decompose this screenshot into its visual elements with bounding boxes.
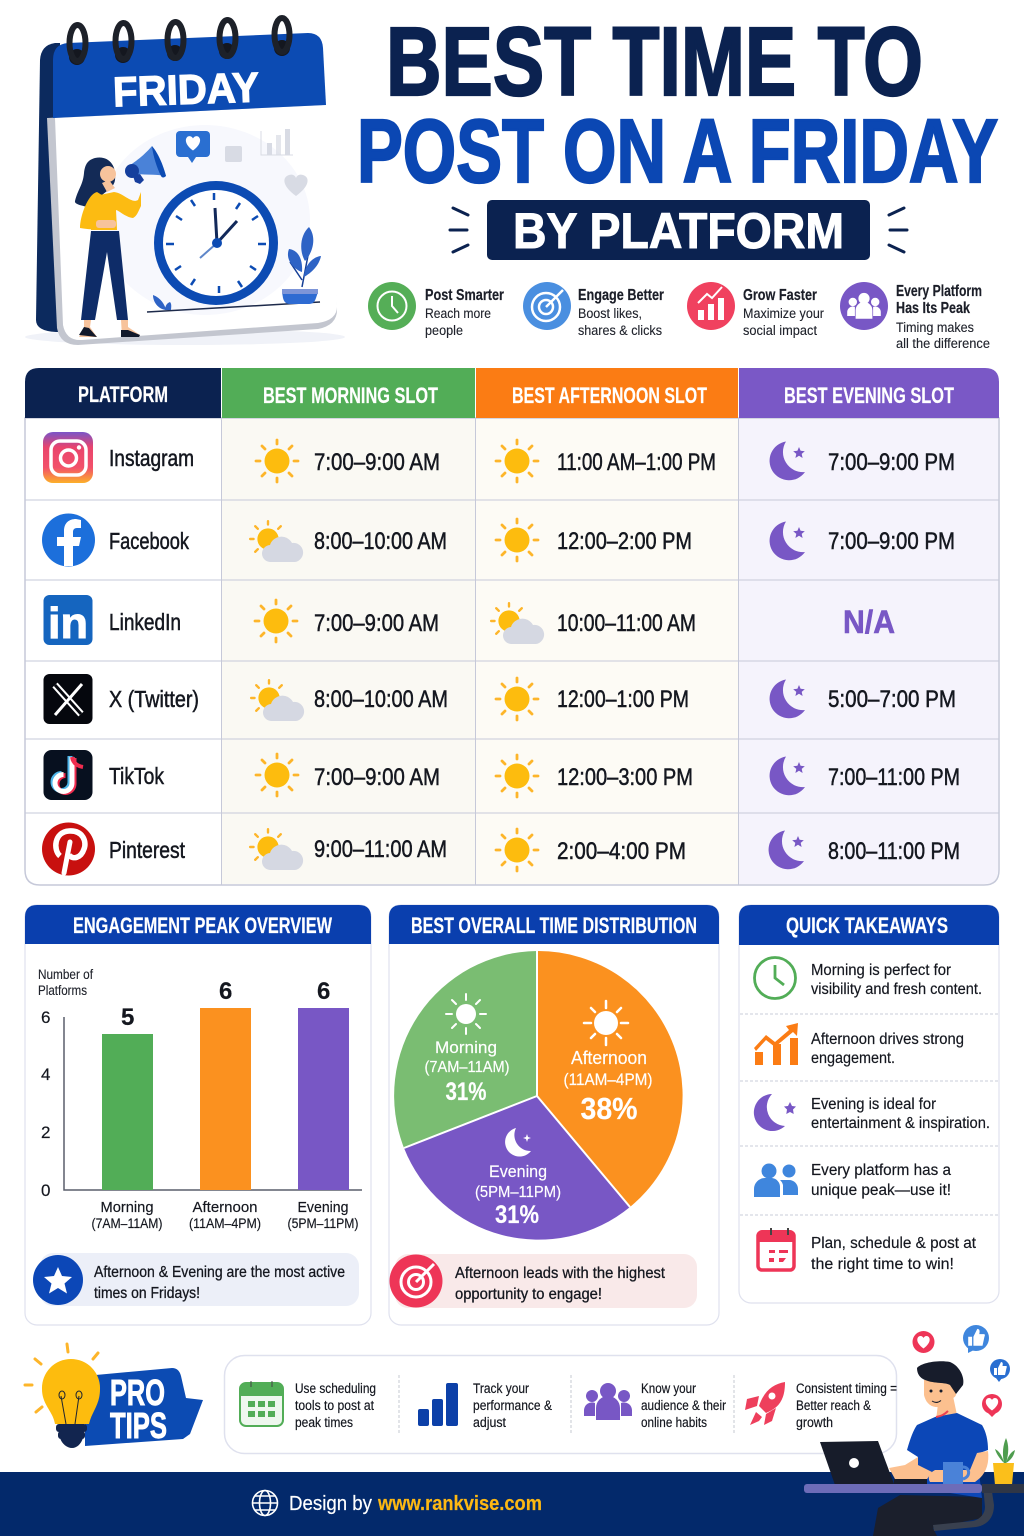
pro tips badge (25, 1344, 203, 1448)
tip: consistency (745, 1381, 897, 1430)
faded icons (225, 129, 308, 196)
takeaway: every platform: unique peak—use it! (811, 1182, 951, 1199)
row: TikTok: TikTok (109, 763, 164, 789)
icon: Instagram (43, 432, 93, 483)
table background (25, 418, 999, 885)
row: Instagram: 7:00–9:00 AM (314, 449, 440, 476)
morning slice icon (446, 994, 486, 1034)
feature: grow faster: social impact (743, 323, 817, 338)
reaction: big thumb (963, 1325, 989, 1353)
icon: X (44, 674, 92, 724)
evening slice label: 31% (495, 1201, 539, 1229)
takeaway: plan (758, 1228, 977, 1273)
feature: grow faster: Maximize your (743, 306, 824, 321)
tip: consistency: Consistent timing = (796, 1381, 897, 1396)
row: LinkedIn (44, 595, 895, 648)
TIPS: TIPS (110, 1405, 167, 1446)
feature: every platform: Every Platform (896, 283, 982, 300)
morning column fill (222, 419, 475, 884)
takeaway: evening: Evening is ideal for (811, 1096, 936, 1113)
bar chart: (7AM–11AM) (92, 1215, 162, 1231)
calendar blue header (53, 33, 326, 118)
tip: scheduling: peak times (295, 1415, 353, 1430)
row: Instagram (43, 432, 955, 483)
row: Facebook (42, 514, 955, 566)
panel heading (25, 905, 371, 944)
row: TikTok (44, 750, 960, 800)
row: LinkedIn: 10:00–11:00 AM (557, 610, 696, 637)
bar chart: (11AM–4PM) (189, 1215, 261, 1231)
row: TikTok: 7:00–9:00 AM (314, 764, 440, 791)
neck (936, 1396, 957, 1420)
footer credit: www.rankvise.com (377, 1493, 542, 1515)
morning slice label: Morning (435, 1038, 497, 1057)
light bulb (25, 1344, 100, 1448)
like bubble (176, 131, 210, 163)
reaction: heart (912, 1331, 934, 1353)
feature: engage better: Boost likes, (578, 306, 642, 321)
woman with megaphone (75, 146, 166, 337)
afternoon slice label: Afternoon (571, 1048, 647, 1068)
row: Pinterest: 8:00–11:00 PM (828, 838, 960, 865)
bar chart: Platforms (38, 983, 87, 998)
tip: audience (584, 1381, 726, 1430)
feature: post smarter: Post Smarter (425, 287, 504, 304)
plant pot (993, 1438, 1015, 1485)
footer credit (252, 1490, 542, 1516)
bar chart: Morning (100, 1199, 154, 1216)
row: Facebook: 7:00–9:00 PM (828, 528, 955, 555)
reaction: small thumb (990, 1359, 1010, 1382)
callout: afternoon leads (390, 1254, 697, 1308)
feature: every platform: all the difference (896, 336, 990, 351)
row: Facebook: 8:00–10:00 AM (314, 528, 447, 555)
row: Instagram: 7:00–9:00 PM (828, 449, 955, 476)
tip: consistency: Better reach & (796, 1398, 871, 1413)
callout: most active (33, 1253, 359, 1306)
feature: every platform (840, 282, 990, 351)
plant (282, 227, 321, 304)
FRIDAY label: FRIDAY (112, 63, 260, 115)
icon: globe (252, 1490, 278, 1516)
header: evening: BEST EVENING SLOT (784, 383, 954, 408)
morning slice label: (7AM–11AM) (424, 1059, 510, 1076)
calendar back cover (36, 43, 70, 332)
bar chart: 6 (317, 978, 330, 1005)
feature: engage better: Engage Better (578, 287, 664, 304)
bar chart: 5 (121, 1004, 134, 1031)
bar chart: Evening (298, 1199, 348, 1216)
man (873, 1361, 994, 1536)
illustration: Friday calendar (25, 18, 345, 345)
panel: tips strip (224, 1356, 897, 1454)
tip: audience: online habits (641, 1415, 707, 1430)
PRO: PRO (110, 1372, 165, 1413)
mug (943, 1462, 969, 1485)
takeaway: plan: the right time to win! (811, 1256, 954, 1273)
row: X (Twitter): X (Twitter) (109, 686, 199, 712)
feature: every platform: Timing makes (896, 320, 974, 335)
bar chart: 2 (41, 1123, 50, 1142)
row: Pinterest: 2:00–4:00 PM (557, 838, 686, 865)
row: X (Twitter): 8:00–10:00 AM (314, 686, 448, 713)
tip: performance: performance & (473, 1398, 552, 1413)
afternoon slice label: (11AM–4PM) (564, 1070, 652, 1089)
panel heading: QUICK TAKEAWAYS (786, 913, 948, 938)
hair (917, 1361, 963, 1394)
feature: post smarter: Reach more (425, 306, 491, 321)
tip: performance: Track your (473, 1381, 529, 1396)
badge accents (450, 208, 907, 252)
afternoon column fill (476, 419, 738, 884)
laptop (820, 1441, 927, 1485)
header: platform (25, 368, 221, 418)
afternoon slice icon (584, 1001, 628, 1045)
pie chart (394, 951, 683, 1240)
desk (804, 1484, 1024, 1493)
face (924, 1378, 956, 1407)
row: Facebook: Facebook (109, 528, 189, 554)
callout: afternoon leads: opportunity to engage! (455, 1286, 602, 1303)
icon: TikTok (44, 750, 92, 800)
morning slice label: 31% (446, 1078, 486, 1106)
feature: grow faster (687, 282, 824, 338)
feature: post smarter: people (425, 323, 463, 338)
row: Pinterest: 9:00–11:00 AM (314, 836, 447, 863)
evening column fill (739, 419, 998, 884)
calendar shadow (25, 329, 345, 345)
small leaves (153, 295, 171, 310)
bar chart: 4 (41, 1065, 50, 1084)
feature: every platform: Has Its Peak (896, 300, 970, 317)
header: evening (739, 368, 999, 418)
shirt (907, 1413, 988, 1498)
bar chart: (5PM–11PM) (288, 1215, 358, 1231)
legs (873, 1495, 982, 1536)
schedule table (25, 368, 999, 885)
tip: audience: audience & their (641, 1398, 726, 1413)
ground line (147, 302, 320, 312)
bar chart: 6 (41, 1008, 50, 1027)
panel heading (739, 905, 999, 945)
tip: scheduling: tools to post at (295, 1398, 374, 1413)
tip: audience: Know your (641, 1381, 696, 1396)
takeaway: plan: Plan, schedule & post at (811, 1235, 977, 1252)
icon: LinkedIn: in (48, 599, 88, 648)
illustration: man at laptop (804, 1325, 1024, 1536)
bar chart: 0 (41, 1181, 50, 1200)
row: X (Twitter) (44, 674, 956, 724)
arms (889, 1457, 932, 1482)
panel heading: BEST OVERALL TIME DISTRIBUTION (411, 913, 697, 938)
row: Facebook: 12:00–2:00 PM (557, 528, 692, 555)
evening slice label (475, 1162, 561, 1229)
bar chart: 6 (219, 978, 232, 1005)
header: morning (222, 368, 475, 418)
row: LinkedIn: LinkedIn (109, 609, 181, 635)
tip: performance: adjust (473, 1415, 506, 1430)
callout: most active: Afternoon & Evening are the most active (94, 1264, 345, 1281)
feature: post smarter (368, 282, 504, 338)
header: afternoon (476, 368, 738, 418)
clock (154, 181, 278, 305)
row: Pinterest (42, 822, 960, 876)
icon: Pinterest (42, 822, 95, 876)
bar chart (38, 967, 362, 1231)
footer credit: Design by (289, 1493, 372, 1515)
row: TikTok: 12:00–3:00 PM (557, 764, 693, 791)
afternoon slice label (564, 1048, 652, 1126)
afternoon slice label: 38% (580, 1091, 638, 1126)
reaction: heart (982, 1394, 1002, 1417)
takeaway: every platform: Every platform has a (811, 1162, 951, 1179)
takeaway: evening: entertainment & inspiration. (811, 1115, 990, 1132)
feature: engage better: shares & clicks (578, 323, 662, 338)
header: platform: PLATFORM (78, 382, 168, 407)
takeaway: morning: visibility and fresh content. (811, 981, 982, 998)
bar chart: Afternoon (192, 1199, 258, 1216)
panel: time distribution (389, 905, 719, 1325)
panel heading (389, 905, 719, 944)
feature: engage better (523, 282, 664, 338)
row: Pinterest: Pinterest (109, 837, 186, 863)
tip: performance (418, 1381, 552, 1430)
takeaway: morning (754, 958, 982, 998)
illustration background blob (100, 125, 310, 315)
bar chart: Number of (38, 967, 93, 982)
header: morning: BEST MORNING SLOT (263, 383, 438, 408)
evening slice icon (505, 1128, 531, 1157)
takeaway: afternoon (754, 1023, 964, 1067)
calendar white sheet (55, 105, 337, 340)
panel: engagement peak overview (25, 905, 371, 1325)
tip: consistency: growth (796, 1415, 833, 1430)
takeaway: evening (754, 1094, 990, 1132)
panel heading: ENGAGEMENT PEAK OVERVIEW (73, 913, 332, 938)
N/A value: N/A (843, 604, 895, 640)
evening slice label: Evening (489, 1162, 547, 1181)
row: Instagram: 11:00 AM–1:00 PM (557, 449, 716, 476)
takeaway: morning: Morning is perfect for (811, 962, 951, 979)
feature: grow faster: Grow Faster (743, 287, 817, 304)
header: afternoon: BEST AFTERNOON SLOT (512, 383, 707, 408)
takeaway: every platform (754, 1162, 951, 1199)
row: X (Twitter): 5:00–7:00 PM (828, 686, 956, 713)
subtitle badge: BY PLATFORM (513, 203, 844, 259)
banner (85, 1368, 203, 1446)
chair (933, 1485, 994, 1531)
icon: Facebook (42, 514, 95, 566)
row: TikTok: 7:00–11:00 PM (828, 764, 960, 791)
row: Instagram: Instagram (109, 445, 194, 471)
calendar rings (69, 18, 290, 65)
morning slice label (424, 1038, 510, 1106)
row: X (Twitter): 12:00–1:00 PM (557, 686, 689, 713)
tip: scheduling (240, 1381, 376, 1430)
takeaway: afternoon: Afternoon drives strong (811, 1031, 964, 1048)
takeaway: afternoon: engagement. (811, 1050, 895, 1067)
tip: scheduling: Use scheduling (295, 1381, 376, 1396)
evening slice label: (5PM–11PM) (475, 1184, 561, 1201)
callout: afternoon leads: Afternoon leads with the highest (455, 1265, 666, 1282)
calendar page edge (47, 105, 337, 345)
callout: most active: times on Fridays! (94, 1285, 200, 1302)
row: LinkedIn: 7:00–9:00 AM (314, 610, 439, 637)
footer band (0, 1472, 1024, 1536)
panel: quick takeaways (739, 905, 999, 1303)
